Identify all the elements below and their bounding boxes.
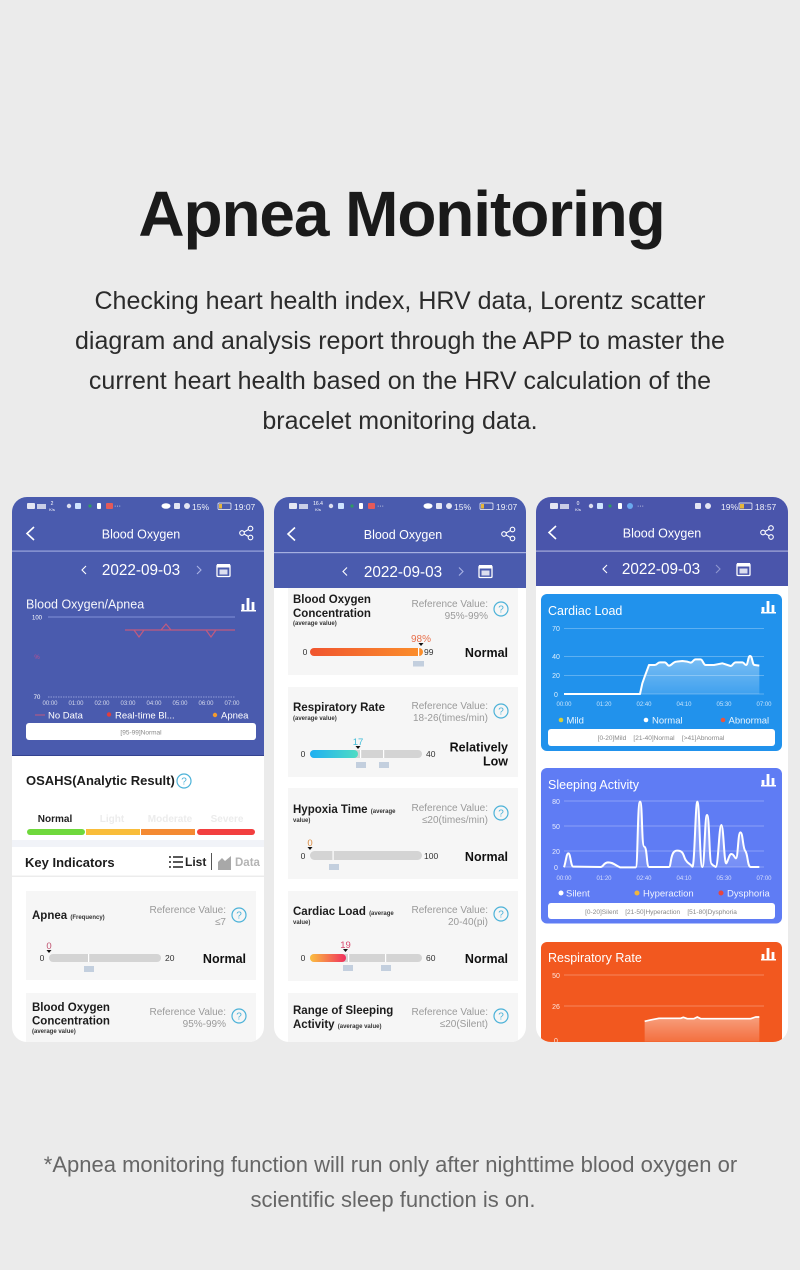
date selector: [343, 564, 492, 581]
chart: blood oxygen / apnea: 04:00: [146, 701, 162, 707]
chart card: sleeping activity: 20: [552, 849, 560, 856]
chart: blood oxygen / apnea: 70: [34, 695, 41, 701]
date selector: [82, 562, 230, 579]
status bar: 19%: [721, 502, 738, 512]
card: hypoxia time: [288, 788, 518, 879]
key indicators heading with list and data tabs: Key Indicators: [25, 855, 115, 870]
blue header: [536, 497, 788, 586]
card: hypoxia time: 0: [301, 851, 306, 861]
chart card: sleeping activity: Dysphoria: [727, 888, 770, 900]
status bar: 16.4: [313, 501, 323, 507]
status bar: K/s: [575, 507, 581, 512]
card: blood oxygen concentration, partly cropped: ?: [236, 1012, 242, 1022]
chart: blood oxygen / apnea: 03:00: [120, 701, 136, 707]
card: apnea: Normal: [203, 952, 246, 966]
card: respiratory rate: 0: [301, 749, 306, 759]
status bar: K/s: [49, 507, 55, 512]
status bar: 2: [51, 501, 54, 507]
panel: phone screen 3, trend charts: [536, 497, 788, 1042]
status bar: K/s: [315, 507, 321, 512]
card: respiratory rate: 40: [426, 749, 436, 759]
card: apnea: 0: [40, 953, 45, 963]
OSAHS analytic result: Normal: [38, 814, 72, 825]
footnote: scientific sleep function is on.: [251, 1187, 535, 1212]
chart card: sleeping activity: 04:10: [676, 876, 692, 882]
card: hypoxia time: ?: [498, 808, 504, 820]
chart card: sleeping activity: 80: [552, 799, 560, 806]
card: hypoxia time: Reference Value:: [411, 803, 488, 814]
chart: blood oxygen / apnea: Blood Oxygen/Apnea: [26, 598, 144, 612]
card: blood oxygen concentration: Reference Value:: [411, 599, 488, 610]
OSAHS analytic result: OSAHS(Analytic Result): [26, 773, 175, 788]
chart card: cardiac load: 05:30: [716, 702, 732, 708]
card: respiratory rate: ?: [498, 706, 504, 718]
card: cardiac load: Reference Value:: [411, 905, 488, 916]
card: respiratory rate: Respiratory Rate: [293, 702, 385, 714]
intro paragraph: bracelet monitoring data.: [262, 407, 538, 435]
card: cardiac load: 60: [426, 953, 436, 963]
status bar: [27, 501, 256, 512]
card: respiratory rate: 18-26(times/min): [413, 713, 488, 724]
chart card: cardiac load: [541, 594, 782, 751]
status bar: 18:57: [755, 502, 777, 512]
chart card: sleeping activity: 00:00: [556, 876, 572, 882]
status bar: 19:07: [234, 502, 256, 512]
card: range of sleeping activity, partly cropped: Range of Sleeping: [293, 1005, 393, 1017]
chart: blood oxygen / apnea: 05:00: [172, 701, 188, 707]
chart card: sleeping activity: 50: [552, 824, 560, 831]
OSAHS analytic result: [26, 773, 255, 835]
blue header and chart area: [12, 497, 264, 756]
card: hypoxia time: 0: [307, 838, 313, 849]
card: blood oxygen concentration, partly cropped: [26, 993, 256, 1042]
card: respiratory rate: (average value): [293, 716, 337, 722]
card: apnea: Reference Value:: [149, 905, 226, 916]
key indicators heading with list and data tabs: Data: [235, 857, 261, 869]
chart: blood oxygen / apnea: [26, 598, 256, 707]
status bar: [289, 501, 518, 512]
chart card: cardiac load: 20: [552, 673, 560, 680]
card: blood oxygen concentration: 98%: [411, 634, 431, 645]
chart: blood oxygen / apnea: 06:00: [198, 701, 214, 707]
chart: blood oxygen / apnea: 00:00: [42, 701, 58, 707]
card: blood oxygen concentration: [288, 588, 518, 675]
intro paragraph: diagram and analysis report through the APP to master the: [75, 327, 725, 355]
chart card: cardiac load: Cardiac Load: [548, 604, 622, 618]
OSAHS analytic result: ?: [181, 776, 187, 788]
chart card: sleeping activity: 01:20: [596, 876, 612, 882]
card: blood oxygen concentration, partly cropped: Concentration: [32, 1016, 110, 1028]
chart card: cardiac load: 70: [552, 626, 560, 633]
chart card: cardiac load: 0: [554, 692, 558, 699]
title: Apnea Monitoring: [138, 178, 665, 250]
chart card: sleeping activity: Silent: [566, 888, 590, 900]
chart card: sleeping activity: 0: [554, 865, 558, 872]
card: blood oxygen concentration: ?: [498, 604, 504, 616]
chart legend: Real-time Bl...: [115, 710, 175, 722]
chart card: respiratory rate, partly cropped: Respiratory Rate: [548, 951, 642, 965]
footnote: [44, 1152, 737, 1212]
card: range of sleeping activity, partly cropped: Reference Value:: [411, 1007, 488, 1018]
card: cardiac load: 20-40(pi): [448, 917, 488, 928]
footnote: *Apnea monitoring function will run only after nighttime blood oxygen or: [44, 1152, 737, 1177]
card: apnea: ?: [236, 910, 242, 922]
card: blood oxygen concentration, partly cropped: (average value): [32, 1029, 76, 1035]
chart legend: Apnea: [221, 710, 249, 722]
card: cardiac load: Cardiac Load (average: [293, 906, 394, 918]
status bar: 15%: [454, 502, 471, 512]
key indicators heading with list and data tabs: [25, 853, 261, 870]
card: range of sleeping activity, partly cropped: ?: [498, 1012, 504, 1022]
card: apnea: Apnea (Frequency): [32, 910, 105, 922]
panel: phone screen 1, blood oxygen overview: [12, 497, 264, 1042]
navigation bar: Blood Oxygen: [102, 528, 180, 542]
intro paragraph: Checking heart health index, HRV data, Lorentz scatter: [94, 287, 706, 315]
chart card: cardiac load: 01:20: [596, 702, 612, 708]
OSAHS analytic result: Light: [100, 814, 125, 825]
chart card: sleeping activity: 02:40: [636, 876, 652, 882]
card: respiratory rate: Reference Value:: [411, 701, 488, 712]
card: cardiac load: value): [293, 920, 310, 926]
card: hypoxia time: Hypoxia Time (average: [293, 804, 396, 816]
card: blood oxygen concentration, partly cropped: 95%-99%: [183, 1019, 226, 1030]
chart card: cardiac load: 02:40: [636, 702, 652, 708]
card: hypoxia time: Normal: [465, 850, 508, 864]
card: apnea: 0: [46, 941, 52, 952]
chart card: sleeping activity: Hyperaction: [643, 888, 694, 900]
status bar: 0: [577, 501, 580, 507]
chart: blood oxygen / apnea: 02:00: [94, 701, 110, 707]
card: hypoxia time: ≤20(times/min): [422, 815, 488, 826]
chart card: respiratory rate, partly cropped: [541, 942, 782, 1052]
normal range pill: [95-99]Normal: [120, 730, 162, 736]
card: range of sleeping activity, partly cropped: ≤20(Silent): [440, 1019, 488, 1030]
chart card: sleeping activity: Sleeping Activity: [548, 778, 640, 792]
key indicators heading with list and data tabs: List: [185, 855, 206, 869]
card: cardiac load: ?: [498, 910, 504, 920]
status bar: ···: [114, 503, 121, 510]
chart: blood oxygen / apnea: 07:00: [224, 701, 240, 707]
card: blood oxygen concentration: 99: [424, 647, 434, 657]
chart card: cardiac load: 04:10: [676, 702, 692, 708]
card: hypoxia time: value): [293, 818, 310, 824]
normal range pill: [26, 723, 256, 740]
card: blood oxygen concentration: (average value): [293, 621, 337, 627]
OSAHS analytic result: Moderate: [148, 814, 193, 825]
blue header: [274, 497, 526, 588]
chart card: cardiac load: 07:00: [756, 702, 772, 708]
OSAHS analytic result: Severe: [211, 814, 244, 825]
chart: blood oxygen / apnea: %: [34, 655, 40, 661]
card: respiratory rate: Low: [483, 754, 508, 768]
panel: phone screen 2, indicator list: [274, 497, 526, 1042]
card: respiratory rate: Relatively: [450, 740, 508, 754]
card: cardiac load: Normal: [465, 952, 508, 966]
card: blood oxygen concentration: 95%-99%: [445, 611, 488, 622]
status bar: 19:07: [496, 502, 518, 512]
chart card: cardiac load: Normal: [652, 716, 683, 726]
card: blood oxygen concentration: Blood Oxygen: [293, 594, 371, 606]
chart card: cardiac load: 40: [552, 654, 560, 661]
navigation bar: [27, 526, 253, 542]
intro paragraph: current heart health based on the HRV calculation of the: [89, 367, 711, 395]
intro paragraph: [75, 287, 725, 435]
chart card: respiratory rate, partly cropped: 26: [552, 1004, 560, 1011]
navigation bar: [549, 526, 773, 540]
card: cardiac load: [288, 891, 518, 981]
card: blood oxygen concentration, partly cropped: Reference Value:: [149, 1007, 226, 1018]
status bar: [550, 501, 777, 512]
card: blood oxygen concentration, partly cropped: Blood Oxygen: [32, 1002, 110, 1014]
chart legend: [35, 710, 249, 722]
card: cardiac load: 0: [301, 953, 306, 963]
card: respiratory rate: 17: [353, 737, 363, 748]
chart: blood oxygen / apnea: 100: [32, 616, 43, 622]
card: range of sleeping activity, partly cropped: Activity (average value): [293, 1019, 381, 1031]
chart card: respiratory rate, partly cropped: 50: [552, 973, 560, 980]
date selector: 2022-09-03: [102, 562, 180, 579]
card: blood oxygen concentration: Normal: [465, 646, 508, 660]
chart card: sleeping activity: [541, 768, 782, 924]
card: range of sleeping activity, partly cropped: [288, 993, 518, 1042]
card: apnea: 20: [165, 953, 175, 963]
chart card: cardiac load: 00:00: [556, 702, 572, 708]
navigation bar: Blood Oxygen: [623, 526, 701, 540]
card: blood oxygen concentration: Concentration: [293, 608, 371, 620]
status bar: ···: [377, 503, 384, 510]
date selector: 2022-09-03: [622, 561, 700, 578]
chart legend: No Data: [48, 710, 84, 722]
chart: blood oxygen / apnea: 01:00: [68, 701, 84, 707]
navigation bar: [288, 527, 515, 542]
chart card: sleeping activity: 05:30: [716, 876, 732, 882]
card: respiratory rate: [288, 687, 518, 777]
chart card: cardiac load: Mild: [566, 716, 584, 726]
card: apnea: ≤7: [215, 917, 226, 928]
chart card: cardiac load: Abnormal: [728, 716, 769, 726]
card: hypoxia time: 100: [424, 851, 438, 861]
card: apnea: [26, 891, 256, 980]
date selector: [603, 561, 750, 578]
status bar: ···: [637, 503, 644, 510]
chart card: cardiac load: [0-20]Mild [21-40]Normal [>41]Abnormal: [598, 735, 725, 742]
card: cardiac load: 19: [340, 940, 351, 951]
status bar: 15%: [192, 502, 209, 512]
navigation bar: Blood Oxygen: [364, 528, 442, 542]
chart card: sleeping activity: [0-20]Silent [21-50]Hyperaction [51-80]Dysphoria: [585, 909, 737, 916]
card: blood oxygen concentration: 0: [303, 647, 308, 657]
date selector: 2022-09-03: [364, 564, 442, 581]
chart card: sleeping activity: 07:00: [756, 876, 772, 882]
